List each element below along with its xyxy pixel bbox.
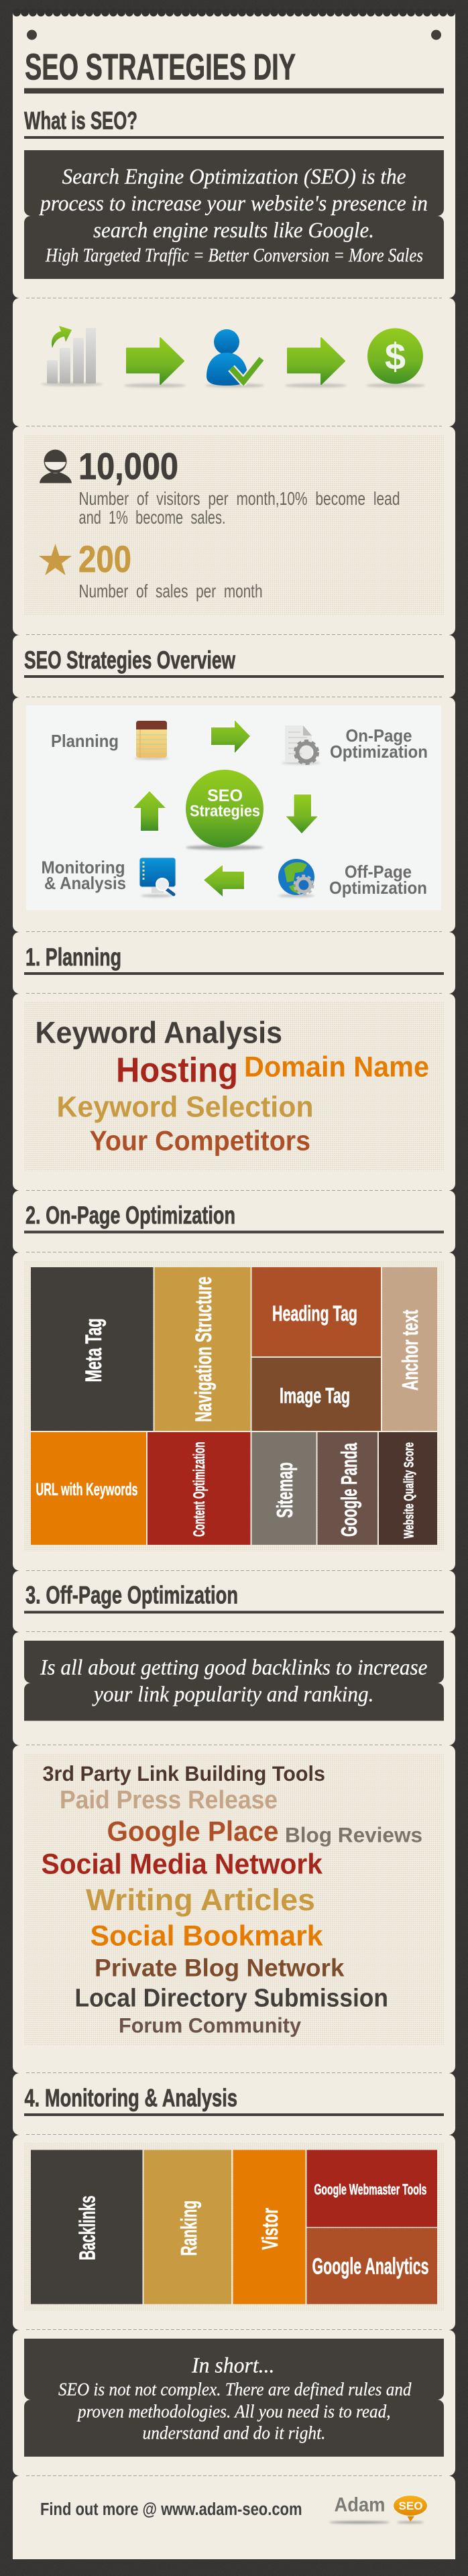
heading: SEO Strategies Overview: SEO Strategies Overview bbox=[24, 646, 235, 674]
tile: Content Optimization bbox=[148, 1432, 251, 1545]
tile: Heading Tag bbox=[252, 1267, 381, 1356]
word: Domain Name: Domain Name bbox=[244, 1051, 429, 1084]
word: Social Bookmark: Social Bookmark bbox=[90, 1920, 323, 1952]
tile: Google Analytics bbox=[307, 2228, 437, 2304]
panel: backlinks callout bbox=[13, 1632, 455, 1745]
callout: definition of SEO: High Targeted Traffic = Better Conversion = More Sales bbox=[45, 245, 423, 266]
arrow: up bbox=[133, 791, 166, 831]
panel: planning heading bbox=[13, 932, 455, 994]
heading: 1. Planning bbox=[24, 943, 444, 975]
label: On-Page Optimization: On-Page bbox=[346, 725, 412, 746]
tile: Anchor text: Anchor text bbox=[398, 1309, 422, 1391]
icon: document with gear bbox=[282, 725, 320, 764]
stat: 200 sales: Number of sales per month bbox=[79, 581, 263, 601]
panel: off-page word cloud bbox=[13, 1745, 455, 2073]
word: 3rd Party Link Building Tools: 3rd Party Link Building Tools bbox=[43, 1761, 325, 1785]
panel: on-page heading bbox=[13, 1191, 455, 1252]
callout: backlinks statement: your link popularity and ranking. bbox=[92, 1683, 373, 1707]
callout: backlinks statement bbox=[24, 1641, 444, 1720]
word: Paid Press Release: Paid Press Release bbox=[60, 1786, 278, 1814]
label: On-Page Optimization: Optimization bbox=[330, 742, 428, 762]
panel: traffic to sales flow icons bbox=[13, 298, 455, 426]
tile: Image Tag: Image Tag bbox=[280, 1384, 350, 1408]
word: Hosting: Hosting bbox=[116, 1051, 238, 1090]
heading: 3. Off-Page Optimization: 3. Off-Page Optimization bbox=[25, 1581, 238, 1609]
logo: Adam SEO: Adam bbox=[334, 2494, 385, 2516]
word: Keyword Analysis: Keyword Analysis bbox=[35, 1015, 282, 1050]
icon: globe with gear bbox=[278, 859, 314, 897]
icon: dollar coin bbox=[366, 329, 425, 388]
callout: definition of SEO: process to increase your website's presence in bbox=[39, 192, 428, 216]
badge: SEO Strategies bbox=[186, 770, 264, 850]
word: Blog Reviews: Blog Reviews bbox=[285, 1822, 422, 1847]
label: On-Page Optimization bbox=[330, 725, 428, 762]
tile: Ranking: Ranking bbox=[176, 2201, 201, 2256]
tile: Backlinks bbox=[31, 2150, 142, 2304]
word: Social Media Network: Social Media Network bbox=[42, 1848, 323, 1880]
tile: Content Optimization: Content Optimization bbox=[190, 1442, 209, 1537]
label: Off-Page Optimization bbox=[329, 862, 427, 898]
tile: Sitemap bbox=[252, 1432, 316, 1545]
panel: footer bbox=[13, 2475, 455, 2559]
word: Keyword Selection: Keyword Selection bbox=[56, 1090, 314, 1124]
tile: Vistor bbox=[233, 2150, 306, 2304]
arrow: left bbox=[204, 865, 244, 896]
tile: Ranking bbox=[143, 2150, 231, 2304]
tile: Anchor text bbox=[382, 1267, 437, 1431]
tile: Backlinks: Backlinks bbox=[75, 2195, 99, 2260]
heading: 1. Planning: 1. Planning bbox=[25, 943, 121, 971]
tile: Meta Tag bbox=[31, 1267, 153, 1431]
word: Local Directory Submission: Local Directory Submission bbox=[75, 1985, 388, 2013]
stat: 200 sales bbox=[78, 538, 263, 601]
heading: 4. Monitoring & Analysis bbox=[24, 2084, 444, 2116]
text: find out more: Find out more @ www.adam-seo.com bbox=[40, 2500, 302, 2519]
tile: Vistor: Vistor bbox=[257, 2208, 282, 2250]
heading: 3. Off-Page Optimization bbox=[24, 1581, 444, 1613]
word: Private Blog Network: Private Blog Network bbox=[95, 1954, 345, 1982]
callout: definition of SEO bbox=[24, 150, 444, 279]
label: Monitoring & Analysis: Monitoring bbox=[42, 857, 125, 877]
tile: Website Quality Score bbox=[379, 1432, 437, 1545]
tile: Image Tag bbox=[252, 1358, 381, 1431]
stat: 10,000 visitors bbox=[78, 445, 400, 528]
panel: intro bbox=[13, 8, 455, 298]
tile: Navigation Structure: Navigation Structure bbox=[191, 1277, 217, 1422]
panel: strategy cycle diagram bbox=[13, 697, 455, 932]
heading: 2. On-Page Optimization: 2. On-Page Optimization bbox=[25, 1202, 235, 1229]
tile: Heading Tag: Heading Tag bbox=[272, 1301, 357, 1326]
callout: definition of SEO: search engine results like Google. bbox=[93, 219, 374, 243]
label: Monitoring & Analysis: & Analysis bbox=[44, 873, 126, 893]
heading: 4. Monitoring & Analysis: 4. Monitoring & Analysis bbox=[24, 2084, 237, 2112]
arrow: planning to on-page bbox=[211, 720, 250, 753]
stat: 10,000 visitors: and 1% become sales. bbox=[79, 507, 225, 528]
callout: summary: proven methodologies. All you need is to read, bbox=[76, 2402, 390, 2422]
badge: SEO Strategies: SEO bbox=[207, 786, 243, 805]
label: Planning: Planning bbox=[51, 731, 119, 751]
panel: monitoring heading bbox=[13, 2073, 455, 2135]
panel: monitoring treemap bbox=[13, 2135, 455, 2330]
tile: Google Webmaster Tools bbox=[307, 2150, 437, 2227]
stat: 200 sales: 200 bbox=[78, 538, 131, 580]
callout: definition of SEO: Search Engine Optimization (SEO) is the bbox=[62, 165, 406, 189]
icon: dollar coin: $ bbox=[385, 335, 406, 377]
callout: summary: In short... bbox=[191, 2353, 275, 2378]
heading: What is SEO? bbox=[24, 107, 444, 139]
word: Google Place: Google Place bbox=[107, 1816, 279, 1847]
arrow: lead to sale bbox=[285, 338, 347, 388]
panel: off-page heading bbox=[13, 1570, 455, 1632]
callout: summary: understand and do it right. bbox=[142, 2423, 326, 2443]
callout: backlinks statement: Is all about getting good backlinks to increase bbox=[40, 1656, 427, 1680]
title: SEO STRATEGIES DIY bbox=[25, 46, 296, 87]
tile: URL with Keywords: URL with Keywords bbox=[36, 1479, 138, 1499]
icon: monitor with magnifier bbox=[139, 858, 176, 897]
panel: statistics bbox=[13, 426, 455, 635]
icon: notepad bbox=[134, 721, 169, 760]
logo: Adam SEO: SEO bbox=[399, 2500, 422, 2512]
icon: star bbox=[39, 544, 72, 575]
tile: URL with Keywords bbox=[31, 1432, 146, 1545]
icon: bar chart with arrow bbox=[41, 326, 103, 386]
heading: What is SEO?: What is SEO? bbox=[24, 107, 137, 134]
arrow: down bbox=[286, 795, 318, 833]
label: Off-Page Optimization: Optimization bbox=[329, 878, 427, 898]
arrow: traffic to lead bbox=[124, 338, 186, 388]
panel: in short bbox=[13, 2330, 455, 2475]
word: Your Competitors: Your Competitors bbox=[90, 1125, 310, 1156]
icon: visitor bbox=[40, 449, 72, 483]
panel: planning word cloud bbox=[13, 994, 455, 1191]
tile: Google Panda bbox=[318, 1432, 377, 1545]
callout: summary: SEO is not not complex. There are defined rules and bbox=[58, 2379, 412, 2399]
heading: 2. On-Page Optimization bbox=[24, 1202, 444, 1234]
logo: Adam SEO bbox=[329, 2494, 428, 2524]
label: Monitoring & Analysis bbox=[42, 857, 126, 893]
icon: person with check mark bbox=[205, 329, 264, 388]
tile: Navigation Structure bbox=[154, 1267, 251, 1431]
stat: 10,000 visitors: 10,000 bbox=[78, 445, 178, 487]
panel: overview heading bbox=[13, 635, 455, 697]
callout: summary bbox=[24, 2339, 444, 2457]
word: Forum Community: Forum Community bbox=[119, 2013, 301, 2037]
panel: on-page treemap bbox=[13, 1252, 455, 1570]
heading: SEO Strategies Overview bbox=[24, 646, 444, 678]
tile: Sitemap: Sitemap bbox=[272, 1462, 297, 1518]
word: Writing Articles: Writing Articles bbox=[86, 1883, 315, 1917]
tile: Google Panda: Google Panda bbox=[337, 1443, 361, 1537]
tile: Meta Tag: Meta Tag bbox=[81, 1318, 107, 1383]
tile: Website Quality Score: Website Quality Score bbox=[402, 1442, 417, 1538]
label: Off-Page Optimization: Off-Page bbox=[345, 862, 412, 882]
badge: SEO Strategies: Strategies bbox=[190, 802, 260, 821]
